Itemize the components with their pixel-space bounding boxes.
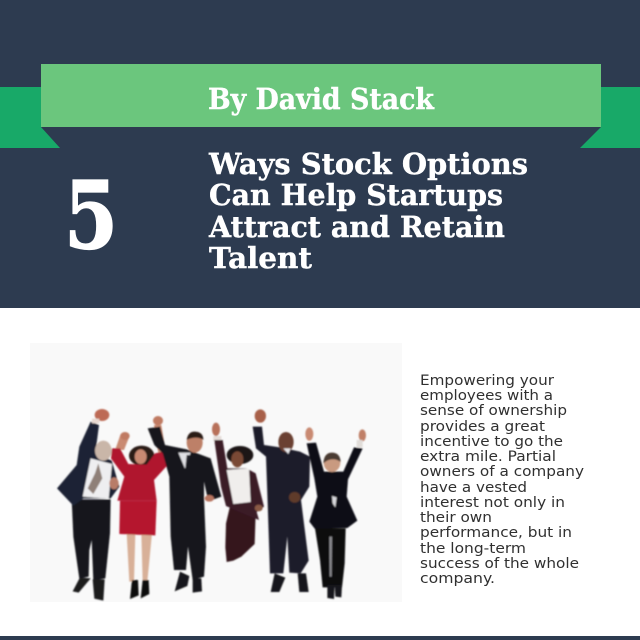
ribbon: main banner — [41, 64, 601, 127]
body paragraph: employees with a — [420, 388, 553, 404]
person 5: man in dark suit — [253, 409, 310, 592]
title: Attract and Retain — [208, 210, 505, 244]
title: Ways Stock Options — [208, 147, 528, 181]
body paragraph — [420, 373, 584, 587]
body paragraph: success of the whole — [420, 556, 579, 572]
person 4: woman in maroon suit — [212, 423, 264, 562]
big number 5: 5 — [64, 161, 118, 271]
body paragraph: interest not only in — [420, 495, 565, 511]
body paragraph: performance, but in — [420, 525, 572, 541]
author byline: By David Stack — [208, 82, 435, 116]
person 1: man in navy suit — [57, 409, 119, 601]
body paragraph: Empowering your — [420, 373, 554, 389]
person 3: man in black suit — [148, 427, 221, 593]
title — [208, 147, 528, 275]
body paragraph: owners of a company — [420, 464, 584, 480]
ribbon: right tail — [580, 87, 640, 148]
body paragraph: incentive to go the — [420, 434, 563, 450]
body paragraph: sense of ownership — [420, 403, 567, 419]
footer strip — [0, 636, 640, 640]
body paragraph: their own — [420, 510, 492, 526]
body paragraph: the long-term — [420, 541, 526, 557]
person 2: woman in red suit — [111, 416, 168, 599]
title: Talent — [209, 241, 313, 275]
ribbon: left tail — [0, 87, 60, 148]
body paragraph: extra mile. Partial — [420, 449, 556, 465]
person 6: woman in black suit — [305, 427, 366, 599]
photo: six business people jumping — [30, 343, 402, 602]
body paragraph: have a vested — [420, 480, 527, 496]
header panel — [0, 0, 640, 308]
title: Can Help Startups — [209, 178, 503, 212]
body paragraph: provides a great — [420, 419, 545, 435]
body paragraph: company. — [420, 571, 495, 587]
